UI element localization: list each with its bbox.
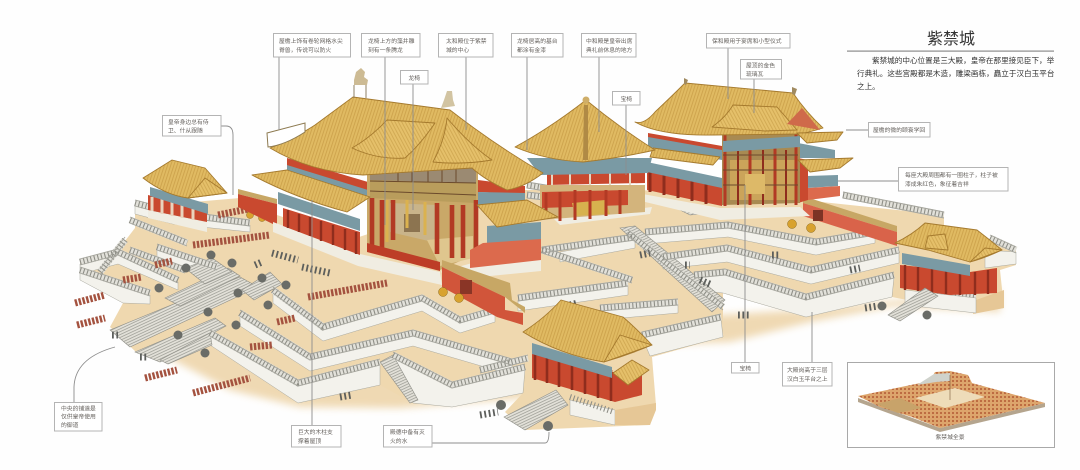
- hall: bottom pavilion: [504, 300, 656, 430]
- label: fire water: 火的水: [390, 437, 408, 445]
- roof wing right lower: [798, 158, 853, 172]
- bronze urns: [154, 250, 932, 431]
- guards in rows: [75, 205, 878, 415]
- label: Zhonghe hall: 中和殿是皇帝出席: [586, 37, 633, 45]
- throne: [404, 214, 420, 232]
- label: Baohe hall: [706, 34, 790, 48]
- label: marble terraces: 大殿岗高于三层: [787, 366, 828, 374]
- right upper bands: [478, 180, 525, 194]
- label: eaves: [868, 122, 930, 137]
- label: Taihe hall: 太和殿位于紫禁: [446, 37, 487, 45]
- detached ridge detail: [267, 123, 305, 147]
- inset: panorama of the Forbidden City: [848, 362, 1054, 448]
- label: throne bottom: [732, 362, 759, 373]
- label: glazed tiles: 屋顶的金色: [746, 62, 775, 70]
- terrace walls: [80, 205, 1016, 407]
- label: caisson: 刻有一条腾龙: [368, 46, 403, 54]
- label: guards: 皇帝身边总有侍: [168, 118, 209, 126]
- label: throne bottom: 宝椅: [740, 364, 751, 372]
- label: imperial way: [54, 402, 102, 431]
- ridge ornaments: [684, 78, 797, 95]
- label: glazed tiles: 琉璃瓦: [746, 70, 764, 78]
- terrace floor: [80, 190, 1016, 430]
- stone balustrades: [80, 182, 1016, 388]
- label: glazed tiles: [740, 60, 782, 79]
- red base: [367, 243, 440, 271]
- label: throne platform: [512, 34, 563, 57]
- label: caisson: 龙椅上方的藻井雕: [368, 37, 415, 45]
- roof wing right upper: [797, 132, 843, 143]
- title rule: [847, 50, 1054, 52]
- upper roof: [270, 97, 543, 190]
- illustration: Forbidden City palace complex: [75, 68, 1016, 431]
- hall: Zhonghe pavilion: [515, 96, 655, 225]
- interior upper timber: [370, 160, 476, 183]
- red wall left: [238, 189, 277, 226]
- label: guards: [162, 116, 221, 136]
- label: Baohe hall: 保和殿用于宴席和小型仪式: [712, 37, 782, 45]
- base and front steps: [273, 222, 442, 285]
- interior rafters: [370, 162, 476, 195]
- label: marble terraces: [782, 362, 832, 386]
- ornament posts: [354, 85, 366, 98]
- intro text: 紫禁城的中心位置是三大殿，皇帝在那里接见臣下，举: [872, 55, 1055, 65]
- label: throne middle: [612, 92, 640, 105]
- interior floor: [427, 236, 473, 266]
- label: throne platform: 都涂有金漆: [517, 46, 546, 54]
- hall: left side pavilion: [143, 160, 227, 232]
- golden water vats rear: [246, 212, 816, 232]
- label: roof ornaments: [274, 34, 350, 57]
- golden water vats front: [438, 288, 464, 302]
- left wing walls: [647, 170, 722, 206]
- intro text: 行典礼。这些宫殿都是木造，雕梁画栋，矗立于汉白玉平台: [857, 68, 1055, 78]
- front gable roof: [712, 105, 797, 131]
- label: timber columns: 巨大的木柱支: [298, 428, 333, 436]
- leader lines: [74, 48, 898, 443]
- label: throne top: [400, 70, 428, 84]
- title: 紫禁城: [927, 30, 975, 48]
- left columns: [283, 208, 360, 255]
- cut-away interior: [722, 130, 800, 205]
- label: columns: 每座大殿周围都有一圈柱子，柱子被: [905, 171, 998, 179]
- inset caption: 紫禁城全景: [936, 433, 965, 441]
- label: roof ornaments: 屋檐上饰有卷轮网格水尖: [279, 37, 343, 45]
- left blue bands: [278, 192, 360, 231]
- ridge ornament right: [441, 91, 455, 108]
- interior ornate frieze: [370, 180, 476, 203]
- right base: [440, 258, 541, 278]
- label: caisson: [362, 34, 420, 57]
- red wall centre: [442, 260, 525, 325]
- ground shadow: [125, 290, 1000, 408]
- label: imperial way: 中央的铺道是: [61, 404, 96, 412]
- label: imperial way: 的御道: [61, 421, 79, 429]
- roof wing left lower: [650, 148, 720, 165]
- gilded columns: [387, 200, 425, 242]
- label: timber columns: 撑着屋顶: [298, 437, 321, 445]
- label: columns: [898, 168, 1008, 191]
- intro text: 之上。: [857, 81, 880, 91]
- label: throne platform: 龙椅居高的基台: [517, 37, 558, 45]
- base: [637, 193, 810, 220]
- right wing walls: [798, 143, 835, 158]
- inset city map: [858, 371, 1045, 432]
- left lower roof: [252, 170, 370, 212]
- label: fire water: [384, 426, 432, 447]
- label: eaves: 屋檐的微的颐衰学回: [873, 126, 925, 134]
- centre gable roof: [433, 118, 492, 163]
- throne dais: [390, 203, 437, 243]
- label: throne top: 龙椅: [408, 74, 420, 82]
- main roof: [635, 83, 823, 135]
- cut-away interior: [367, 160, 478, 270]
- hall: right pavilion: [888, 223, 1004, 321]
- label: fire water: 殿德中备有灭: [390, 428, 425, 436]
- label: guards: 卫、什从跟随: [168, 126, 203, 134]
- red wall right: [803, 196, 897, 246]
- label: throne middle: 宝椅: [620, 95, 632, 103]
- label: imperial way: 仅供皇帝使用: [61, 412, 96, 420]
- label: Zhonghe hall: [582, 34, 636, 57]
- label: Taihe hall: [438, 34, 493, 57]
- label: columns: 漆成朱红色，象征着吉祥: [905, 180, 969, 188]
- hall: Baohe hall (rear): [635, 78, 853, 220]
- ridge ornament left: [354, 68, 368, 85]
- interior columns: [372, 198, 476, 258]
- intro text: [857, 55, 1055, 91]
- red gable: [787, 108, 820, 130]
- left gable roof: [352, 120, 435, 158]
- right lower walls: [487, 222, 541, 244]
- label: timber columns: [292, 426, 341, 447]
- label: Taihe hall: 城的中心: [446, 46, 469, 54]
- right lower roof: [477, 200, 558, 227]
- central ramps and stairs: [110, 200, 725, 403]
- hall: Taihe main hall: [252, 68, 558, 285]
- label: Zhonghe hall: 典礼前休息的地方: [586, 46, 633, 54]
- label: marble terraces: 汉白玉平台之上: [787, 375, 828, 383]
- label: roof ornaments: 脊兽，传说可以防火: [279, 46, 331, 54]
